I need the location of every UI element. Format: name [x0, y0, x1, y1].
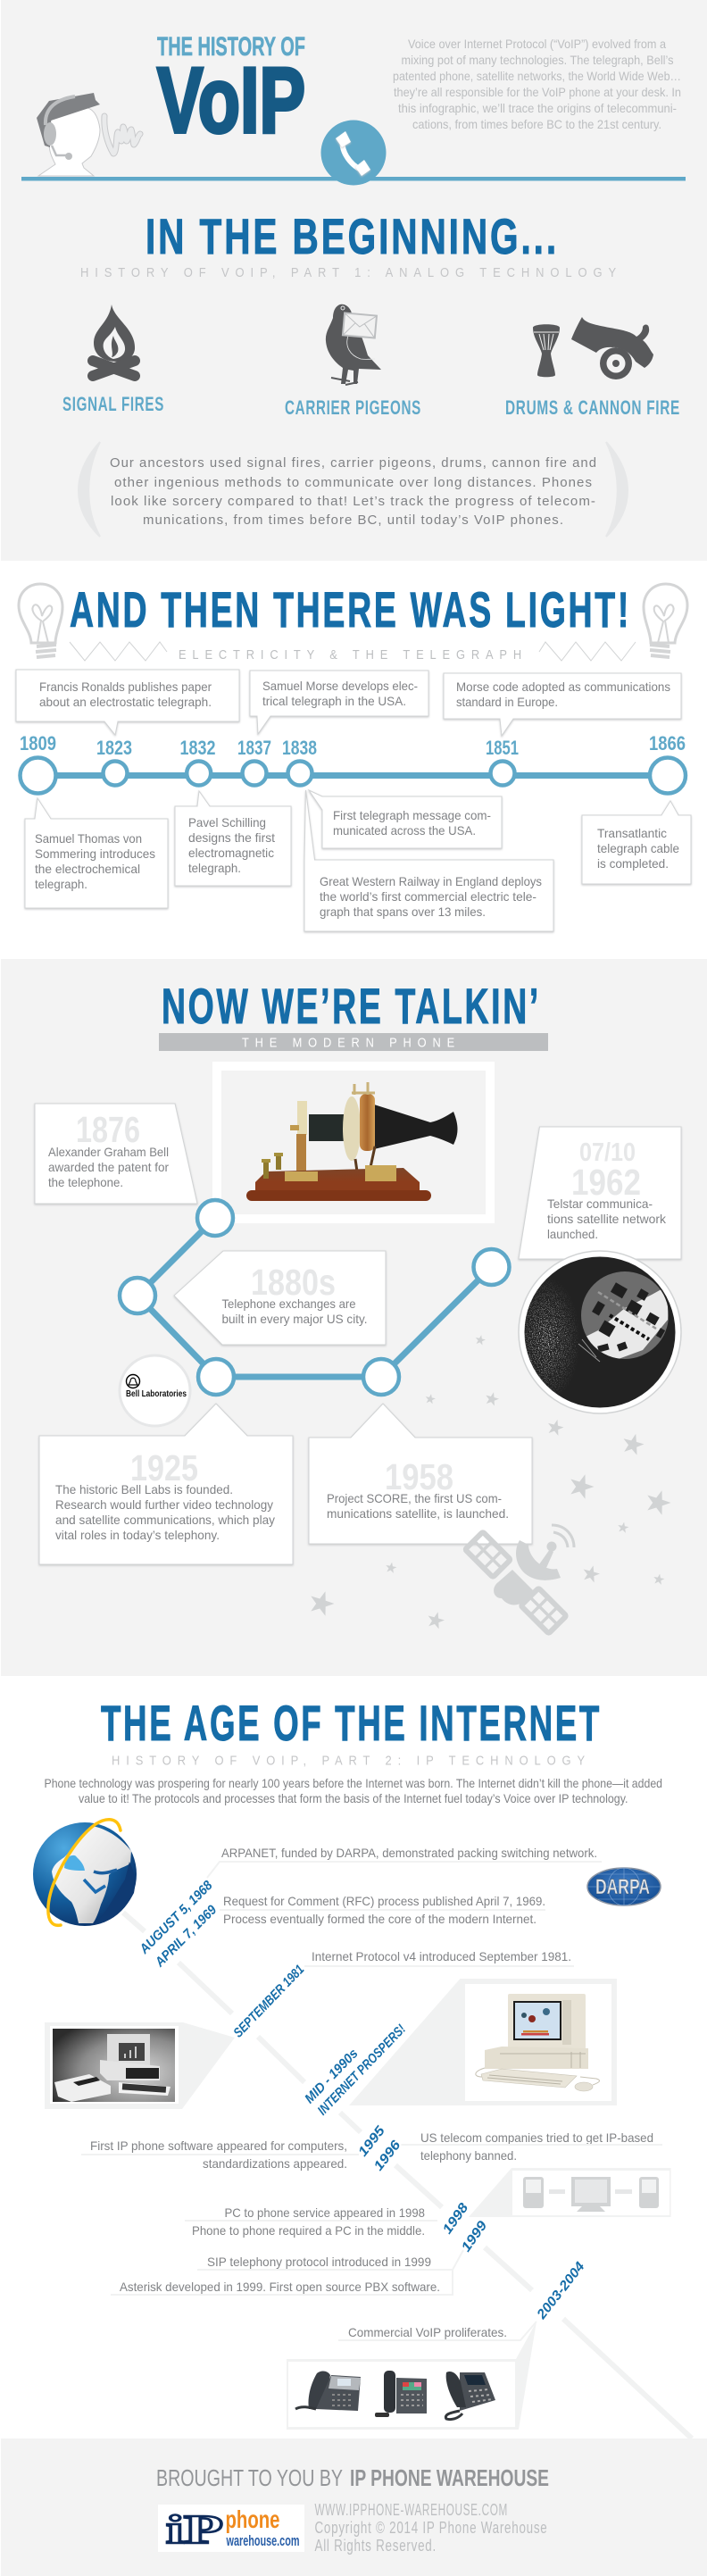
callout: pavel schilling	[175, 791, 291, 886]
body paragraph	[110, 456, 597, 528]
text: sip and asterisk: Asterisk developed in 1999. First open source PBX software.	[120, 2280, 440, 2294]
text: first ip phone software: standardizations appeared.	[203, 2156, 347, 2171]
timeline: modern phone path	[120, 1200, 509, 1395]
callout: 1925: The historic Bell Labs is founded.	[55, 1482, 233, 1496]
label: carrier pigeons: CARRIER PIGEONS	[285, 396, 421, 419]
callout: francis ronalds	[16, 670, 239, 735]
callout: 1958	[309, 1404, 532, 1544]
intro paragraph	[393, 37, 681, 131]
callout: 1876: awarded the patent for	[48, 1160, 169, 1174]
date: mid 1990s: MID - 1990s	[302, 2046, 362, 2106]
date: internet prospers: INTERNET PROSPERS!	[315, 2022, 409, 2118]
photo: bell telephone	[212, 1062, 495, 1223]
parenthesis left	[79, 442, 100, 537]
footer text: Copyright © 2014 IP Phone Warehouse	[314, 2519, 548, 2537]
callout: pavel schilling: Pavel Schilling	[188, 815, 266, 829]
body paragraph: munications, from times before BC, until today’s VoIP phones.	[143, 513, 564, 528]
icon: right light bulb	[644, 584, 687, 657]
icon: pc to phone diagram	[469, 2168, 671, 2217]
panel: footer	[1, 2438, 707, 2576]
icon: phone circle	[321, 120, 386, 186]
logo: ip phone warehouse	[158, 2505, 304, 2552]
text: rfc	[220, 1894, 545, 1926]
timeline: telegraph: 1866	[649, 732, 686, 754]
callout: 1876: the telephone.	[48, 1175, 123, 1189]
callout: 1876: 1876	[76, 1109, 140, 1150]
logo: ip phone warehouse: phone	[225, 2505, 280, 2533]
text: pc to phone	[185, 2205, 437, 2238]
timeline: telegraph: 1832	[180, 737, 216, 759]
text: arpanet: ARPANET, funded by DARPA, demonstrated packing switching network.	[221, 1846, 597, 1860]
callout: first telegraph message: First telegraph message com-	[333, 808, 491, 822]
callout: samuel morse: trical telegraph in the USA.	[262, 694, 406, 708]
callout: 1962 telstar: 1962	[571, 1162, 641, 1203]
text: first ip phone software	[81, 2138, 359, 2171]
icon: headset operator	[37, 93, 140, 176]
text: sip and asterisk: SIP telephony protocol introduced in 1999	[207, 2255, 431, 2269]
callout: von sommering: Samuel Thomas von	[35, 831, 142, 846]
callout: francis ronalds: about an electrostatic telegraph.	[39, 695, 212, 709]
callout: 1925	[39, 1404, 293, 1564]
icon: bell laboratories logo	[120, 1355, 190, 1426]
body paragraph: Our ancestors used signal fires, carrier pigeons, drums, cannon fire and	[110, 456, 597, 471]
panel: the age of the internet	[33, 1695, 692, 2438]
footer text	[314, 2501, 548, 2555]
text: first ip phone software: First IP phone software appeared for computers,	[90, 2138, 347, 2153]
callout: great western railway: graph that spans over 13 miles.	[320, 905, 486, 919]
label: signal fires: SIGNAL FIRES	[62, 393, 164, 415]
date: 2003-2004: 2003-2004	[534, 2259, 588, 2322]
intro paragraph: cations, from times before BC to the 21st century.	[412, 117, 661, 131]
date: april 7, 1969: APRIL 7, 1969	[152, 1902, 220, 1971]
divider line	[21, 177, 686, 180]
callout: 1962 telstar: 07/10	[579, 1138, 636, 1167]
callout: great western railway	[304, 790, 553, 931]
icon: globe	[33, 1820, 137, 1926]
icon: left light bulb	[19, 584, 62, 657]
timeline: telegraph: 1838	[282, 737, 317, 759]
callout: 1876: Alexander Graham Bell	[48, 1145, 169, 1159]
timeline: telegraph: 1823	[96, 737, 132, 759]
callout: pavel schilling: electromagnetic	[188, 846, 274, 860]
callout: von sommering: telegraph.	[35, 877, 87, 891]
callout: first telegraph message: municated across the USA.	[333, 823, 476, 838]
date: 1995: 1995	[355, 2123, 388, 2160]
callout: 1880s: 1880s	[251, 1262, 336, 1303]
intro paragraph: Voice over Internet Protocol (“VoIP”) evolved from a	[408, 37, 666, 51]
subtitle: the history of: THE HISTORY OF	[157, 32, 305, 62]
timeline: telegraph	[20, 732, 686, 793]
subheading bar: the modern phone	[159, 1033, 548, 1051]
parenthesis right	[606, 442, 628, 537]
callout: samuel morse: Samuel Morse develops elec-	[262, 679, 418, 693]
callout: von sommering: the electrochemical	[35, 862, 140, 876]
text: rfc: Request for Comment (RFC) process published April 7, 1969.	[223, 1894, 545, 1908]
text: sip and asterisk	[111, 2250, 463, 2295]
text: commercial voip	[338, 2322, 536, 2340]
timeline: telegraph: 1851	[486, 737, 519, 759]
photo: voip desk phones	[287, 2322, 536, 2430]
callout: von sommering: Sommering introduces	[35, 846, 155, 861]
text: rfc: Process eventually formed the core of the modern Internet.	[223, 1912, 536, 1926]
panel: now we're talkin	[1, 959, 707, 1676]
text: us telecom: US telecom companies tried to get IP-based	[420, 2130, 653, 2145]
footer heading: BROUGHT TO YOU BY	[156, 2464, 343, 2491]
subheading: ip technology: HISTORY OF VOIP, PART 2: IP TECHNOLOGY	[112, 1754, 591, 1768]
intro paragraph: value to it! The protocols and processes that form the basis of the Internet fuel today’s Voice over IP technology.	[79, 1791, 628, 1805]
icon: drum	[533, 324, 560, 377]
icon: stars	[306, 1334, 674, 1630]
callout: great western railway: Great Western Railway in England deploys	[320, 874, 542, 888]
icon: darpa logo	[587, 1868, 661, 1905]
callout: 1962 telstar: launched.	[547, 1227, 598, 1241]
logo: ip phone warehouse: iP	[166, 2506, 223, 2552]
callout: transatlantic cable	[582, 801, 691, 884]
footer text: All Rights Reserved.	[314, 2537, 437, 2555]
icon: carrier pigeon	[326, 304, 381, 385]
intro paragraph: they’re all responsible for the VoIP phone at your desk. In	[394, 85, 681, 99]
intro paragraph	[45, 1776, 662, 1805]
callout: 1962 telstar: Telstar communica-	[547, 1196, 653, 1211]
callout: 1958: munications satellite, is launched.	[327, 1506, 509, 1521]
callout: francis ronalds: Francis Ronalds publishes paper	[39, 679, 212, 694]
photo: macintosh computer	[349, 1979, 617, 2105]
subheading: electricity and the telegraph: ELECTRICITY & THE TELEGRAPH	[179, 647, 528, 663]
icon: satellite	[465, 1525, 574, 1633]
text: commercial voip: Commercial VoIP proliferates.	[348, 2325, 507, 2339]
callout: transatlantic cable: is completed.	[597, 856, 669, 871]
callout: morse code: standard in Europe.	[456, 695, 558, 709]
intro paragraph: this infographic, we’ll trace the origins of telecommuni-	[398, 101, 677, 115]
icon: cannon	[571, 317, 653, 379]
callout: transatlantic cable: Transatlantic	[597, 826, 667, 840]
date: september 1981: SEPTEMBER 1981	[230, 1962, 307, 2040]
timeline: telegraph: 1809	[20, 732, 56, 754]
body paragraph: other ingenious methods to communicate over long distances. Phones	[114, 476, 593, 490]
text: pc to phone: Phone to phone required a PC in the middle.	[192, 2223, 425, 2238]
callout: transatlantic cable: telegraph cable	[597, 841, 679, 855]
text: us telecom	[402, 2130, 662, 2163]
callout: morse code: Morse code adopted as communications	[456, 679, 670, 694]
callout: 1876	[35, 1104, 197, 1204]
callout: first telegraph message	[309, 790, 502, 848]
text: pc to phone: PC to phone service appeared in 1998	[225, 2205, 425, 2220]
callout: 1925: 1925	[130, 1447, 198, 1488]
footer heading	[156, 2464, 549, 2491]
heading: in the beginning: IN THE BEGINNING...	[146, 208, 559, 264]
subheading: analog technology: HISTORY OF VOIP, PART 1: ANALOG TECHNOLOGY	[80, 265, 622, 280]
timeline: telegraph: 1837	[237, 737, 271, 759]
callout: 1880s	[174, 1251, 386, 1345]
intro paragraph: patented phone, satellite networks, the World Wide Web…	[393, 69, 681, 83]
footer heading: IP PHONE WAREHOUSE	[350, 2464, 549, 2491]
callout: great western railway: the world’s first commercial electric tele-	[320, 889, 536, 904]
date: august 5, 1968: AUGUST 5, 1968	[137, 1878, 216, 1957]
callout: 1962 telstar	[519, 1127, 681, 1259]
callout: pavel schilling: telegraph.	[188, 861, 241, 875]
callout: 1958: Project SCORE, the first US com-	[327, 1491, 502, 1505]
text: arpanet	[207, 1846, 602, 1878]
intro paragraph: mixing pot of many technologies. The telegraph, Bell’s	[402, 53, 673, 67]
footer text: WWW.IPPHONE-WAREHOUSE.COM	[314, 2501, 508, 2519]
date: 1998: 1998	[440, 2200, 472, 2237]
callout: pavel schilling: designs the first	[188, 830, 275, 845]
callout: 1925: Research would further video technology	[55, 1497, 273, 1512]
logo: ip phone warehouse: warehouse.com	[226, 2532, 300, 2549]
callout: von sommering	[25, 798, 168, 908]
callout: morse code	[444, 673, 681, 736]
date: 1996: 1996	[370, 2138, 404, 2174]
date: 1999: 1999	[459, 2218, 491, 2255]
panel: header and in the beginning	[1, 0, 707, 561]
text: internet protocol v4: Internet Protocol v4 introduced September 1981.	[312, 1949, 571, 1963]
title: VoIP: VoIP	[157, 49, 305, 153]
subheading bar: the modern phone: THE MODERN PHONE	[242, 1036, 461, 1050]
icon: signal fire	[93, 304, 135, 376]
icon: darpa logo: DARPA	[595, 1875, 650, 1899]
callout: 1962 telstar: tions satellite network	[547, 1212, 667, 1226]
text: us telecom: telephony banned.	[420, 2148, 517, 2163]
photo: ibm pc	[45, 2022, 235, 2109]
body paragraph: look like sorcery compared to that! Let’s track the progress of telecom-	[111, 495, 596, 509]
panel: and then there was light	[16, 581, 691, 931]
photo: telstar satellite in space	[518, 1251, 681, 1413]
callout: 1880s: built in every major US city.	[221, 1312, 368, 1326]
callout: 1925: vital roles in today’s telephony.	[55, 1528, 220, 1542]
icon: bell laboratories logo: Bell Laboratories	[126, 1389, 187, 1399]
callout: 1880s: Telephone exchanges are	[221, 1296, 356, 1311]
callout: 1925: and satellite communications, which play	[55, 1513, 275, 1527]
callout: samuel morse	[250, 671, 428, 734]
callout: 1958: 1958	[385, 1456, 453, 1497]
